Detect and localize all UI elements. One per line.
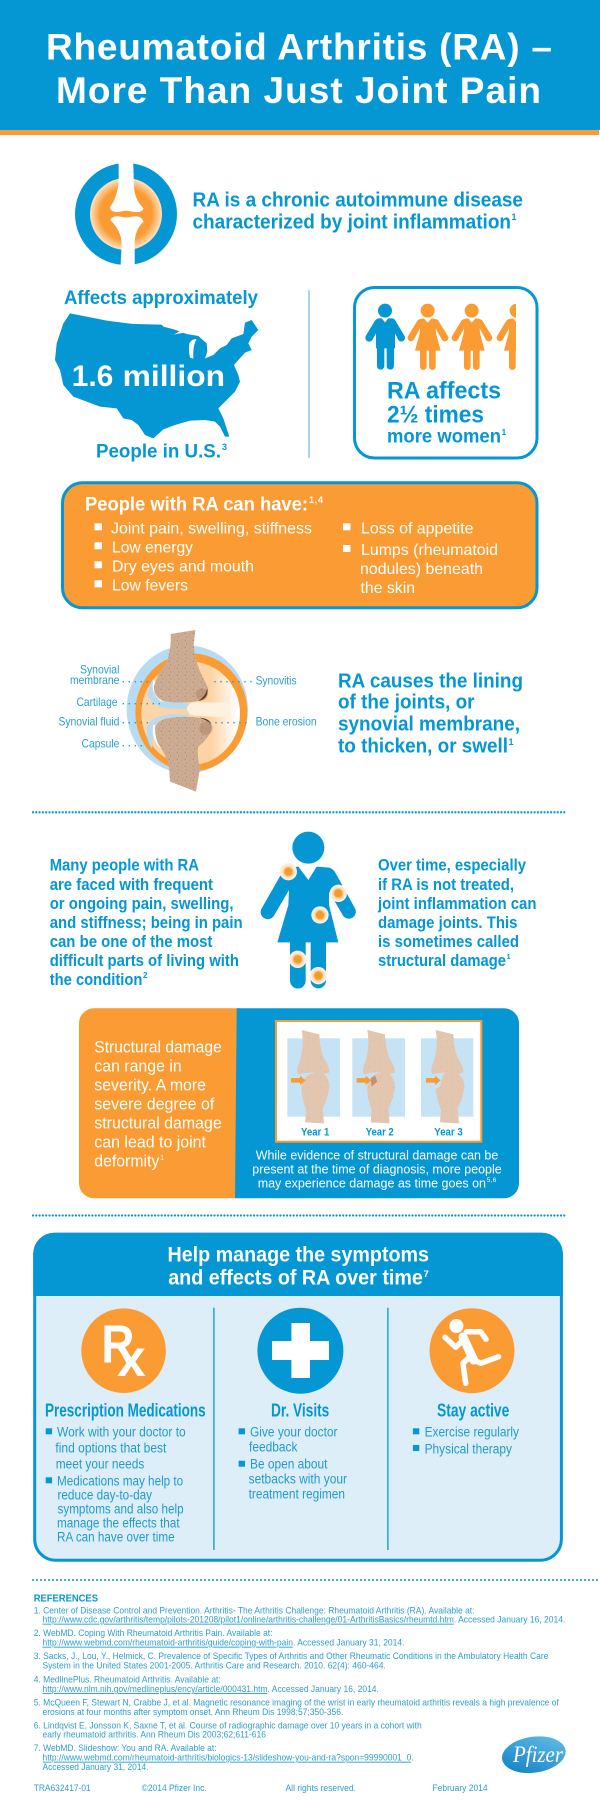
text: severity: severity. A more — [94, 1077, 206, 1095]
year labels: Year 1 — [301, 1126, 329, 1138]
reference 1 — [34, 1605, 565, 1625]
text: pain statement: the condition — [50, 971, 142, 989]
caption: damage over time: While evidence of structural damage can be — [256, 1147, 498, 1162]
icon: Rx: x — [117, 1330, 146, 1388]
list: right column: nodules) beneath — [360, 561, 483, 578]
label: bone erosion: Bone erosion — [256, 715, 317, 729]
list: left column — [94, 520, 312, 594]
list: right column: Lumps (rheumatoid — [361, 542, 498, 559]
diagram: inflamed joint — [58, 630, 317, 792]
stat text: 2½ times more women: more women — [387, 426, 501, 447]
text: structural damage statement: joint inflammation can — [377, 895, 536, 913]
text: RA causes lining to swell: RA causes the lining — [338, 669, 523, 692]
bone erosion marks — [196, 688, 213, 735]
heading: Dr. Visits — [271, 1401, 329, 1421]
list: symptoms and also help — [58, 1502, 184, 1517]
text: severity: can range in — [94, 1058, 182, 1076]
list: treatment regimen — [249, 1486, 345, 1501]
text: RA causes lining to swell — [338, 669, 523, 758]
heading: Stay active — [437, 1401, 509, 1421]
reference 6: 6. Lindqvist E, Jonsson K, Saxne T, et al. Course of radiographic damage over 10 years in a cohort with — [34, 1720, 422, 1730]
callout dots — [123, 682, 252, 746]
reference 2: 2. WebMD. Coping With Rheumatoid Arthritis Pain. Available at: — [34, 1628, 273, 1638]
footer: TRA632417-01 — [34, 1783, 91, 1793]
list: meet your needs — [56, 1457, 145, 1472]
text: severity — [94, 1039, 222, 1171]
list: Exercise regularly — [425, 1425, 519, 1440]
text: severity: structural damage — [94, 1115, 222, 1133]
icon: woman 2 — [452, 304, 492, 370]
references — [34, 1593, 565, 1772]
reference 7 — [34, 1743, 414, 1772]
text: pain statement: difficult parts of living with — [50, 952, 239, 970]
text: structural damage statement: is sometimes called — [378, 933, 519, 951]
text: pain statement: 2 — [143, 971, 148, 980]
list: feedback — [249, 1439, 298, 1454]
icon: half woman — [496, 304, 516, 370]
list: Be open about — [250, 1457, 328, 1472]
icon: medical cross — [257, 1308, 343, 1394]
map: United States — [55, 313, 258, 438]
list: Physical therapy — [425, 1441, 512, 1456]
panel: symptoms list — [62, 483, 537, 608]
reference 5: erosions at four months after symptom onset. Ann Rheum Dis 1998;57;350-356. — [42, 1707, 343, 1717]
list: right column — [343, 520, 498, 597]
caption: damage over time: may experience damage as time goes on — [258, 1175, 486, 1190]
footer: All rights reserved. — [286, 1783, 356, 1793]
reference 3: 3. Sacks, J., Lou, Y., Helmick, C. Prevalence of Specific Types of Arthritis and Other Rheumatic Conditions in the Ambulatory Health Care — [34, 1651, 548, 1661]
text: pain statement: are faced with frequent — [50, 876, 213, 894]
stat text: 2½ times more women: 2½ times — [387, 401, 484, 428]
text: structural damage statement: damage joints. This — [378, 914, 517, 932]
label: synovial membrane — [70, 662, 120, 687]
intro statement: 1 — [512, 212, 517, 222]
text: structural damage statement: structural damage — [378, 952, 506, 970]
upper bone — [154, 630, 208, 703]
icon: Rx — [81, 1308, 166, 1393]
list: left column: Low energy — [112, 539, 193, 556]
reference 2: http://www.webmd.com/rheumatoid-arthritis/guide/coping-with-pain. Accessed January 31, 2014. — [42, 1638, 404, 1648]
year labels: Year 2 — [366, 1126, 394, 1138]
footer — [34, 1783, 488, 1793]
list: left column: Joint pain, swelling, stiffness — [111, 520, 312, 537]
heading: people with RA can have: People with RA can have: — [85, 495, 308, 516]
list: Work with your doctor to — [57, 1425, 186, 1440]
label: synovial fluid: Synovial fluid — [58, 715, 119, 729]
text: pain statement: or ongoing pain, swelling, — [50, 895, 234, 913]
heading: affects approximately: Affects approximately — [64, 288, 258, 309]
footer: ©2014 Pfizer Inc. — [142, 1783, 207, 1793]
reference 7: 7. WebMD. Slideshow: You and RA. Available at: — [34, 1743, 217, 1753]
text: structural damage statement: 1 — [506, 952, 511, 961]
reference 5: 5. McQueen F, Stewart N, Crabbe J, et al. Magnetic resonance imaging of the wrist in early rheumatoid arthritis reveals a high prevalence of — [34, 1697, 559, 1707]
reference 4 — [34, 1674, 379, 1694]
reference 7: Accessed January 31, 2014. — [42, 1762, 148, 1772]
list: Medications may help to — [57, 1474, 183, 1489]
icon: man — [365, 304, 405, 370]
header banner — [0, 0, 600, 135]
list: right column: the skin — [360, 580, 415, 597]
text: RA causes lining to swell: synovial membrane, — [338, 713, 520, 736]
list: reduce day-to-day — [58, 1488, 152, 1503]
heading: references: REFERENCES — [34, 1593, 98, 1605]
list — [413, 1425, 519, 1456]
reference 2 — [34, 1628, 404, 1648]
list: left column: Low fevers — [112, 577, 188, 594]
text: structural damage statement: if RA is not treated, — [378, 876, 514, 894]
logo: Pfizer — [500, 1732, 568, 1777]
year labels — [301, 1126, 463, 1138]
panel: structural damage — [79, 1008, 519, 1198]
text: RA causes lining to swell: 1 — [508, 737, 514, 747]
heading: help manage: Help manage the symptoms — [168, 1243, 429, 1267]
stat text: 2½ times more women: 1 — [502, 427, 506, 437]
heading: help manage — [168, 1243, 429, 1289]
year labels: Year 3 — [434, 1126, 463, 1138]
panel: help manage symptoms — [33, 1233, 563, 1560]
caption: people in US: People in U.S. — [96, 442, 221, 463]
reference 4: 4. MedlinePlus. Rheumatoid Arthritis. Available at: — [34, 1674, 221, 1684]
stat: 1.6 million: million — [123, 360, 225, 393]
lower bone — [155, 717, 212, 792]
column: doctor visits — [239, 1308, 347, 1501]
column: prescription medications — [45, 1308, 206, 1545]
text: pain statement: can be one of the most — [50, 933, 213, 951]
label: synovial membrane: membrane — [70, 673, 120, 687]
reference 1: http://www.cdc.gov/arthritis/temp/pilots-201208/pilot1/online/arthritis-challenge/01-ArthritisBasics/rheumtd.htm. Accessed January 16, 2014. — [42, 1615, 565, 1625]
heading: help manage: and effects of RA over time — [168, 1265, 423, 1289]
text: pain statement: and stiffness; being in pain — [50, 914, 243, 932]
label: synovitis: Synovitis — [256, 674, 297, 688]
text: structural damage statement — [377, 857, 536, 970]
stat: 1.6 million: 1.6 — [72, 360, 113, 393]
panel: women affected — [354, 288, 537, 458]
intro statement — [192, 190, 523, 233]
list — [46, 1425, 186, 1545]
title: More Than Just Joint Pain — [56, 70, 541, 111]
reference 6 — [34, 1720, 422, 1740]
list: manage the effects that — [57, 1516, 180, 1531]
icon: joint in ring — [75, 162, 177, 266]
list: find options that best — [55, 1441, 167, 1456]
text: severity: deformity — [94, 1153, 160, 1171]
caption: damage over time: 5,6 — [487, 1177, 497, 1184]
column: stay active — [413, 1308, 519, 1456]
list: left column: Dry eyes and mouth — [112, 559, 254, 576]
caption: damage over time — [252, 1147, 502, 1190]
text: pain statement: Many people with RA — [50, 857, 199, 875]
heading: Prescription Medications — [45, 1401, 206, 1421]
list: setbacks with your — [249, 1471, 347, 1486]
text: severity: Structural damage — [94, 1039, 222, 1057]
text: severity: severe degree of — [94, 1096, 215, 1114]
icons: man and women — [365, 304, 530, 370]
intro statement: characterized by joint inflammation — [192, 211, 511, 233]
text: severity: can lead to joint — [94, 1134, 206, 1152]
reference 6: early rheumatoid arthritis. Ann Rheum Dis 2003;62;611-616 — [42, 1730, 266, 1740]
heading: people with RA can have: 1,4 — [309, 495, 323, 505]
icon: runner — [430, 1308, 514, 1393]
list: right column: Loss of appetite — [361, 520, 474, 537]
caption: people in US: 3 — [222, 442, 227, 452]
year 3 joint — [421, 1030, 473, 1123]
text: pain statement — [50, 857, 243, 989]
intro statement: RA is a chronic autoimmune disease — [192, 190, 523, 212]
icon: woman 1 — [408, 304, 448, 370]
text: severity: 1 — [160, 1153, 164, 1162]
heading: help manage: 7 — [424, 1269, 429, 1280]
reference 5 — [34, 1697, 559, 1717]
list: Give your doctor — [250, 1425, 338, 1440]
stat text: 2½ times more women — [387, 377, 506, 447]
reference 7: http://www.webmd.com/rheumatoid-arthritis/biologics-13/slideshow-you-and-ra?spon=99990001_0. — [42, 1753, 414, 1763]
icon: Rx: R — [101, 1315, 134, 1375]
list — [239, 1425, 347, 1501]
list: RA can have over time — [57, 1530, 175, 1545]
stat: 1.6 million — [72, 360, 225, 393]
chart: joint damage over three years — [276, 1021, 481, 1142]
label: cartilage: Cartilage — [76, 695, 118, 709]
text: RA causes lining to swell: to thicken, or swell — [338, 735, 508, 758]
footer: February 2014 — [432, 1783, 488, 1793]
text: structural damage statement: Over time, especially — [378, 857, 527, 875]
reference 1: 1. Center of Disease Control and Prevention. Arthritis- The Arthritis Challenge: Rheumatoid Arthritis (RA). Available at: — [34, 1605, 474, 1615]
reference 3: System in the United States 2001-2005. Arthritis Care and Research. 2010. 62(4): 460-464. — [42, 1661, 386, 1671]
caption: damage over time: present at the time of diagnosis, more people — [252, 1161, 502, 1176]
stat text: 2½ times more women: RA affects — [387, 377, 501, 404]
year 2 joint — [352, 1030, 405, 1123]
reference 4: http://www.nlm.nih.gov/medlineplus/ency/article/000431.htm. Accessed January 16, 2014. — [42, 1684, 379, 1694]
logo: Pfizer: Pfizer — [512, 1742, 564, 1767]
panel: US prevalence — [55, 288, 258, 463]
icon: woman with painful joints — [261, 832, 356, 988]
title: Rheumatoid Arthritis (RA) – — [46, 26, 552, 68]
label: capsule: Capsule — [82, 737, 120, 751]
text: RA causes lining to swell: of the joints, or — [338, 691, 475, 714]
year 1 joint — [287, 1030, 340, 1123]
title — [46, 26, 552, 111]
label: synovial membrane: Synovial — [80, 662, 119, 676]
reference 3 — [34, 1651, 548, 1671]
